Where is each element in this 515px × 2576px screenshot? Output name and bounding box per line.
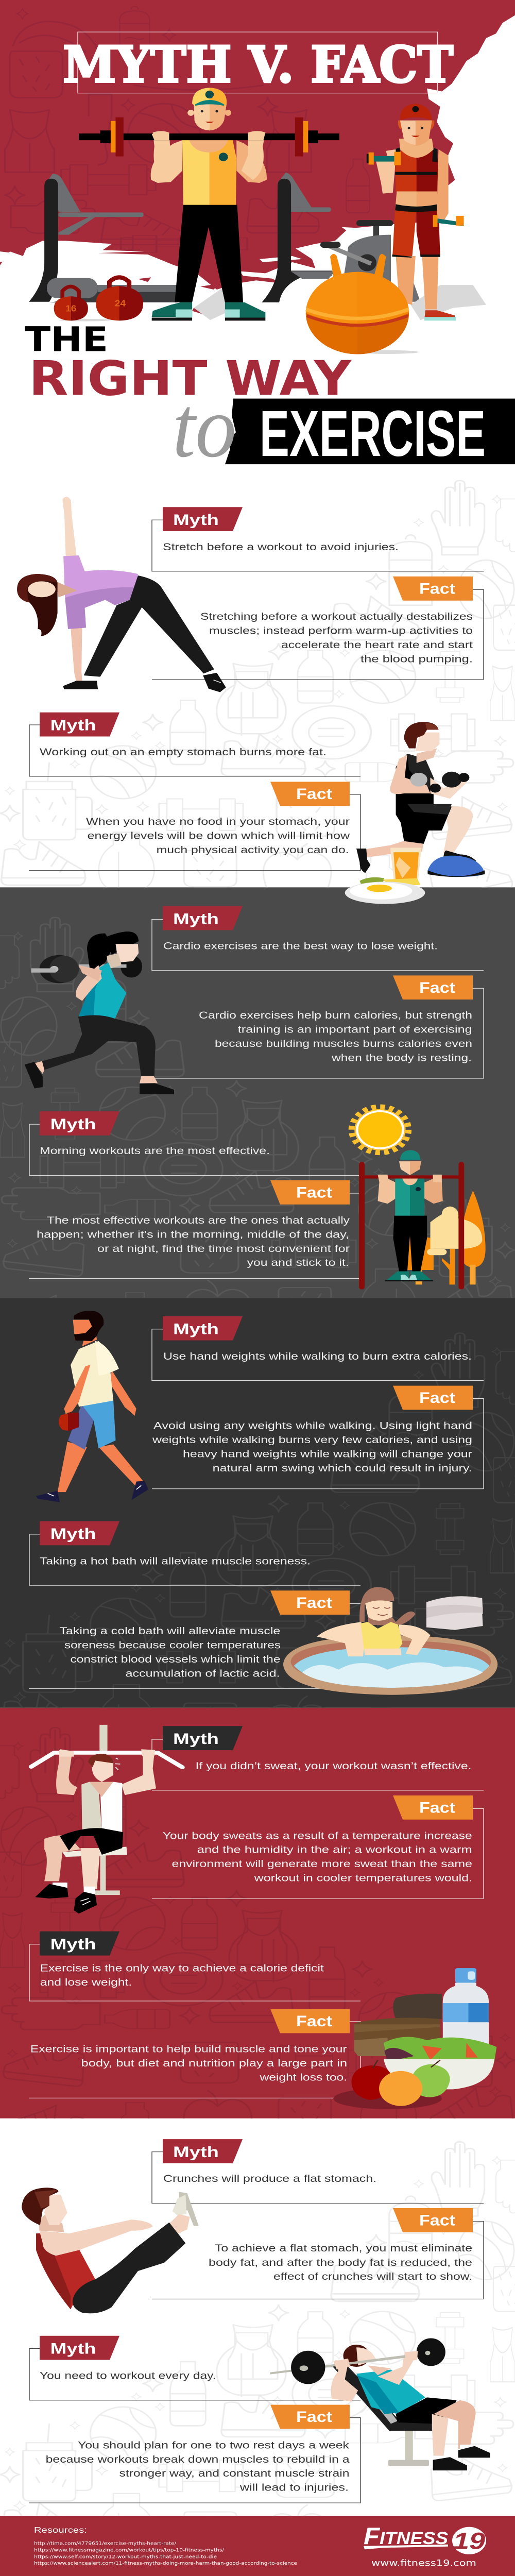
figure: bread, water bottle, salad and fruit [333,1968,496,2109]
logo: fitness 19: FITNESS [364,2522,449,2550]
logo: fitness 19 [364,2522,486,2554]
heading: the: THE [25,319,108,360]
fact text: natural arm swing which could result in injury. [213,1462,472,1473]
fact text: accumulation of lactic acid. [126,1668,280,1679]
fact text: and the humidity in the air; a workout in a warm [197,1844,472,1855]
myth tag [40,2336,119,2360]
fact text: constrict blood vessels which limit the [70,1653,280,1665]
fact tag [393,1795,473,1820]
myth tag: Myth [50,717,96,734]
myth tag: Myth [50,1116,96,1133]
fact tag [393,975,473,999]
panel: myth and fact 10 [29,2336,360,2503]
fact text [199,1009,472,1063]
fact text: will lead to injuries. [239,2482,349,2493]
fact text: effect of crunches will start to show. [273,2270,472,2282]
fact tag [270,1590,350,1615]
myth text: If you didn’t sweat, your workout wasn’t effective. [196,1760,472,1772]
myth text: Cardio exercises are the best way to lose weight. [163,940,438,952]
fact text: stronger way, and constant muscle strain [119,2467,349,2479]
myth tag [163,2139,243,2163]
panel: header banner [0,0,515,476]
myth text: You need to workout every day. [40,2370,216,2381]
fact text: because building muscles burns calories even [215,1038,472,1049]
fact text: You should plan for one to two rest days a week [78,2439,350,2451]
fact text: or at night, find the time most convenient for [97,1243,350,1254]
fact tag: Fact [419,1800,455,1817]
icon: exercise ball [306,254,409,354]
fact text: training is an important part of exercising [238,1024,472,1035]
resource links: https://www.fitnessmagazine.com/workout/tips/top-10-fitness-myths/ [34,2548,225,2553]
figure: man with barbell [79,88,339,320]
myth text: Taking a hot bath will alleviate muscle soreness. [40,1555,311,1567]
myth tag: Myth [173,2144,219,2161]
panel: myth and fact 9 [152,2139,484,2299]
fact text: workout in cooler temperatures would. [253,1872,472,1884]
resources heading: Resources: [34,2526,87,2535]
fact text: Taking a cold bath will alleviate muscle [59,1625,280,1636]
icon: kettlebell 24: 24 [115,298,126,308]
fact text: body fat, and after the body fat is reduced, the [209,2257,472,2268]
fact text [163,1830,472,1884]
resource links [34,2541,297,2566]
resource links: https://www.self.com/story/12-workout-myths-that-just-need-to-die [34,2554,217,2560]
fact text [152,1420,473,1473]
fact text: body, but diet and nutrition play a large part in [81,2057,347,2069]
icon: water bottle [443,1968,489,2059]
fact text: When you have no food in your stomach, your [86,816,350,827]
icon: shadows [59,285,486,354]
icon: sun [352,1108,408,1152]
myth tag: Myth [173,1321,219,1338]
heading: to: to [173,379,236,476]
fact text: Your body sweats as a result of a temperature increase [163,1830,472,1841]
myth tag [40,1521,119,1545]
myth text: Morning workouts are the most effective. [40,1145,270,1157]
fact text: The most effective workouts are the ones that actually [47,1214,350,1226]
icon: exercise bike [320,220,420,302]
figure: woman with dumbbells [367,104,464,320]
panel: footer [34,2522,486,2568]
icon: bread [354,1994,442,2056]
panel: myth and fact 3 [152,906,484,1078]
fact text: much physical activity you can do. [157,844,349,855]
fact text: Stretching before a workout actually destabilizes [200,611,473,622]
fact text: when the body is resting. [331,1052,472,1063]
myth text: and lose weight. [40,1976,132,1988]
fact tag: Fact [419,2212,455,2229]
resource links: https://www.sciencealert.com/11-fitness-myths-doing-more-harm-than-good-according-to-science [34,2561,297,2566]
myth tag: Myth [173,911,219,927]
myth text: Stretch before a workout to avoid injuries. [163,541,399,553]
fact tag: Fact [296,786,332,803]
fact tag: Fact [296,2409,332,2426]
myth tag: Myth [173,1731,219,1748]
fact text: weights while walking burns very few calories, and using [152,1434,472,1445]
myth tag [163,906,243,930]
panel: myth and fact 6 [29,1521,360,1688]
myth text: Working out on an empty stomach burns more fat. [40,746,327,757]
title frame [78,32,438,93]
fact text: accelerate the heart rate and start [281,639,473,651]
myth tag [163,1316,243,1341]
myth text [40,1962,324,1988]
fact text [209,2242,472,2282]
fact text: weight loss too. [259,2072,347,2083]
icon: kettlebell 24 [96,277,143,320]
icon: orange [379,2071,422,2106]
fact tag: Fact [296,2013,332,2030]
fact tag [270,2009,350,2033]
fact text: energy levels will be down which will limit how [88,830,350,841]
myth tag [163,507,243,531]
fact text: because workouts break down muscles to rebuild in a [46,2453,350,2465]
fact text: Exercise is important to help build muscle and tone your [30,2043,347,2055]
icon: apple [351,2060,392,2100]
icon: trees [405,1191,486,1284]
myth text: Use hand weights while walking to burn extra calories. [163,1350,472,1362]
panel: myth and fact 2 [29,713,360,871]
fact text: To achieve a flat stomach, you must eliminate [215,2242,472,2253]
fact tag: Fact [296,1184,332,1201]
fact text [37,1214,350,1268]
figure: walking man with kettlebell [36,1311,148,1502]
myth tag [40,713,119,736]
myth text: Exercise is the only way to achieve a calorie deficit [40,1962,324,1974]
fact text: Avoid using any weights while walking. Using light hand [153,1420,472,1431]
myth tag: Myth [50,2341,96,2358]
icon: salad bowl [384,2037,496,2089]
icon: right treadmill [262,173,335,302]
website: www.fitness19.com [371,2558,476,2568]
fact text: environment will generate more sweat than the same [172,1858,472,1870]
panel: myth and fact 4 [29,1111,360,1278]
myth tag: Myth [50,1936,96,1953]
panel: myth and fact 5 [152,1316,484,1489]
panel: myth and fact 8 [29,1931,360,2098]
illustration: gym scene [29,88,486,354]
figure: man on lat pulldown [31,1725,182,1913]
heading: right way: RIGHT WAY [29,350,352,406]
myth tag [40,1931,119,1956]
fact text: heavy hand weights while walking will change your [183,1448,473,1460]
fact text: muscles; instead perform warm-up activities to [209,625,473,636]
fact text: soreness because cooler temperatures [64,1639,281,1651]
panel: myth and fact 1 [152,507,484,680]
fact text [30,2043,347,2083]
myth tag [40,1111,119,1136]
fact tag [393,577,473,601]
icon: kettlebell 16: 16 [65,303,76,314]
figure: man on incline bench press [270,2338,490,2470]
myth tag [163,1726,243,1750]
logo: fitness 19: 19 [453,2528,486,2554]
fact text: Cardio exercises help burn calories, but strength [199,1009,472,1021]
fact text [86,816,350,855]
figure: woman side stretch [17,497,226,692]
icon: towels [426,1596,483,1630]
icon: left treadmill [29,174,177,302]
fact text [200,611,473,665]
fact tag [393,1386,473,1410]
myth tag: Myth [50,1526,96,1543]
resource links: http://time.com/4779651/exercise-myths-heart-rate/ [34,2541,177,2546]
fact text: happen; whether it’s in the morning, middle of the day, [37,1229,349,1240]
figure: woman lunge with barbell [25,931,174,1094]
fact tag: Fact [296,1595,332,1612]
figure: man lunge with dumbbells [345,722,485,904]
figure: man doing v-sit crunch [22,2188,199,2313]
fact tag: Fact [419,1389,455,1406]
fact tag [270,782,350,806]
figure: woman in bath with towels [283,1587,497,1695]
fact text [59,1625,281,1679]
fact text: the blood pumping. [360,653,473,665]
fact tag [270,2405,350,2429]
fact text: you and stick to it. [247,1257,349,1268]
fact text [46,2439,350,2493]
myth text: Crunches will produce a flat stomach. [163,2173,376,2184]
fact tag: Fact [419,979,455,996]
fact tag [393,2208,473,2232]
icon: green apple [411,2060,450,2097]
myth tag: Myth [173,512,219,529]
figure: man on pull-up bar with sun and trees [352,1108,486,1290]
icon: kettlebell 16 [54,286,88,320]
fact tag [270,1180,350,1205]
fact tag: Fact [419,581,455,597]
panel: myth and fact 7 [152,1726,484,1899]
